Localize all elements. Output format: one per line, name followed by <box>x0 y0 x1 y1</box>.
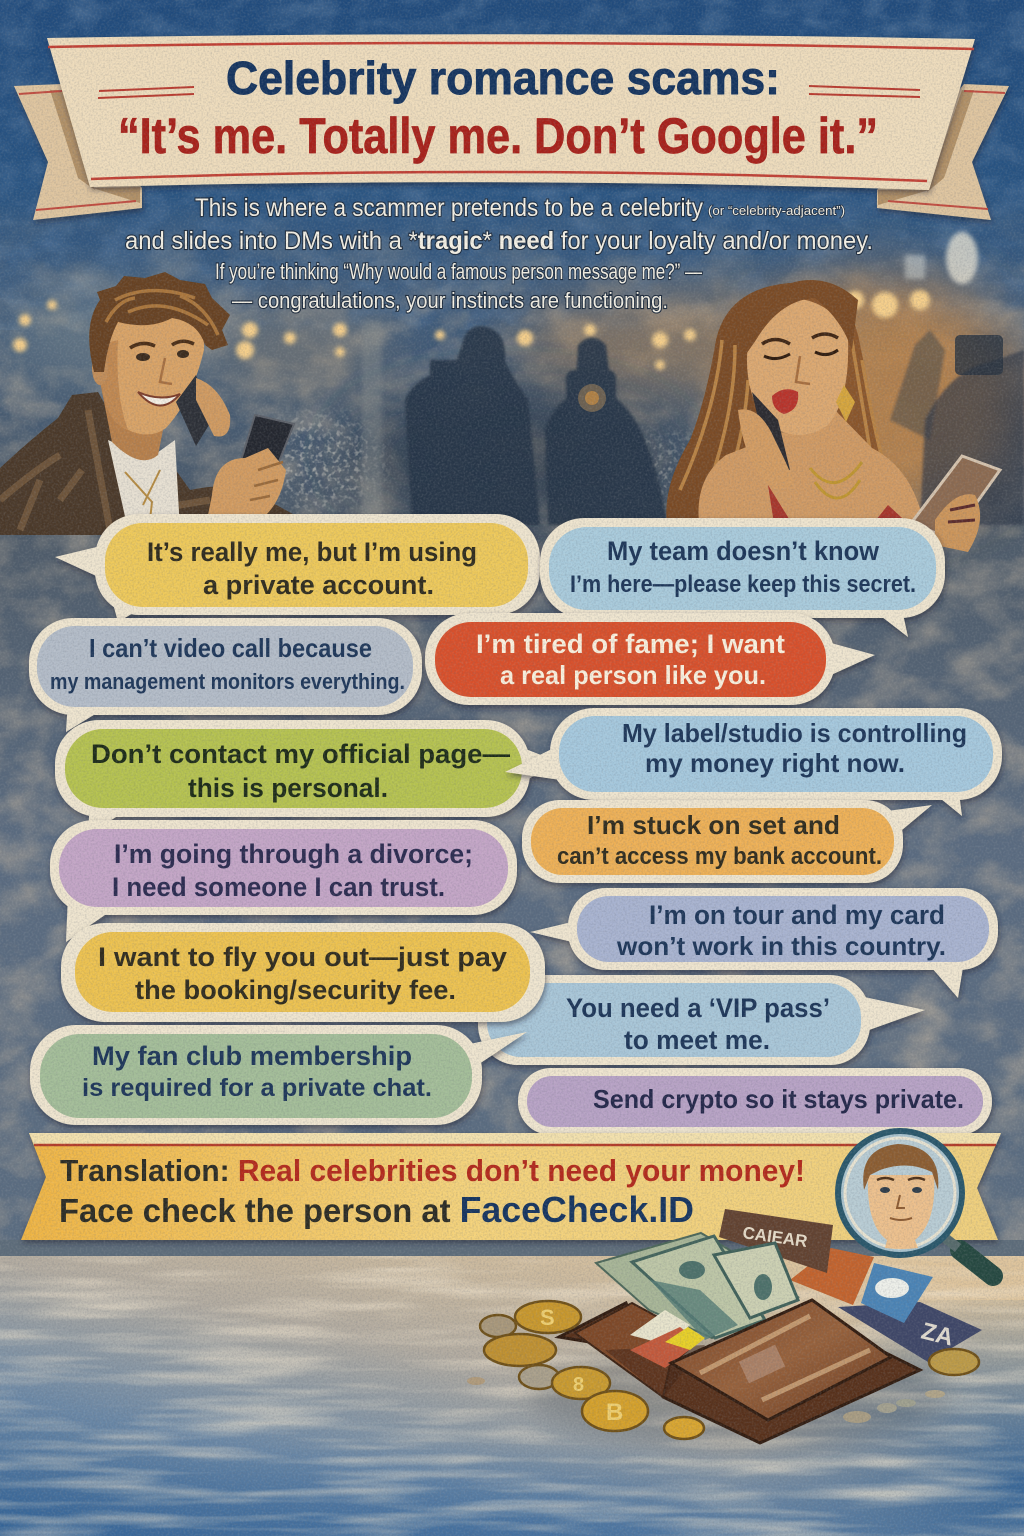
speech bubble: fan club <box>30 1025 527 1125</box>
intro text: (or “celebrity-adjacent”) <box>708 203 845 218</box>
speech bubble: video call <box>29 618 422 732</box>
title line 1: Celebrity romance scams: <box>226 52 780 104</box>
banner main parchment <box>47 34 975 190</box>
speech bubble: keep secret <box>540 518 945 637</box>
speech bubble: label controlling money <box>505 708 1002 816</box>
icon: magnifying glass with face <box>838 1131 993 1276</box>
wallet body <box>559 1300 920 1443</box>
translation line: Translation: Real celebrities don’t need your money! <box>60 1153 805 1188</box>
speech bubble: official page <box>55 720 562 835</box>
speech bubble: divorce: I’m going through a divorce; <box>114 839 473 869</box>
speech bubble: crypto: Send crypto so it stays private. <box>593 1084 964 1114</box>
intro text <box>125 194 873 313</box>
speech bubble: tired of fame: a real person like you. <box>500 660 766 690</box>
intro text: and slides into DMs with a *tragic* need for your loyalty and/or money. <box>125 227 873 255</box>
speech bubble: video call: I can’t video call because <box>89 633 372 663</box>
speech bubble: official page: Don’t contact my official page— <box>91 739 510 769</box>
gold and silver coins <box>467 1301 979 1439</box>
speech bubble: fan club: My fan club membership <box>92 1041 412 1071</box>
speech bubble: stuck on set <box>522 800 932 883</box>
speech bubble: booking fee <box>61 923 545 1022</box>
gold and silver coins: S <box>540 1305 555 1330</box>
gift cards <box>719 1209 982 1362</box>
person: woman blowing a kiss on phones <box>666 280 1000 552</box>
speech bubble: label controlling money: my money right now. <box>645 748 905 778</box>
intro text: If you’re thinking “Why would a famous person message me?” — <box>215 259 702 284</box>
person: smiling man on phones <box>0 272 306 535</box>
speech bubble: keep secret: I’m here—please keep this secret. <box>570 571 916 598</box>
speech bubble: on tour: I’m on tour and my card <box>649 900 945 930</box>
speech bubble: stuck on set: can’t access my bank account. <box>557 843 882 870</box>
speech bubble: VIP pass: You need a ‘VIP pass’ <box>566 993 830 1023</box>
speech bubble: label controlling money: My label/studio is controlling <box>622 718 967 748</box>
title banner <box>14 34 1009 220</box>
speech bubble: fan club: is required for a private chat. <box>82 1074 432 1102</box>
translation banner <box>21 1133 1001 1240</box>
speech bubble: official page: this is personal. <box>188 773 388 803</box>
gift cards: ZA <box>919 1318 956 1352</box>
speech bubble: private account: It’s really me, but I’m using <box>147 537 477 567</box>
speech bubble: on tour: won’t work in this country. <box>616 931 946 961</box>
speech bubble: VIP pass <box>478 975 925 1065</box>
intro text: — congratulations, your instincts are functioning. <box>232 288 668 313</box>
facecheck line: Face check the person at FaceCheck.ID <box>59 1189 694 1230</box>
speech bubble: crypto <box>518 1068 992 1135</box>
gift cards: CAIEAR <box>741 1223 809 1251</box>
speech bubble: booking fee: I want to fly you out—just pay <box>98 942 507 972</box>
speech bubble: tired of fame <box>425 613 875 705</box>
title line 2: “It’s me. Totally me. Don’t Google it.” <box>118 108 878 164</box>
speech bubble: on tour <box>530 888 998 998</box>
intro text: This is where a scammer pretends to be a celebrity <box>195 194 703 222</box>
speech bubble: tired of fame: I’m tired of fame; I want <box>476 629 785 659</box>
banner right ribbon tail <box>877 84 1009 220</box>
speech bubble: VIP pass: to meet me. <box>624 1025 770 1055</box>
speech bubble: divorce: I need someone I can trust. <box>112 872 445 902</box>
speech bubble: video call: my management monitors everything. <box>50 669 405 694</box>
speech bubble: keep secret: My team doesn’t know <box>607 536 880 566</box>
gold and silver coins: 8 <box>573 1374 584 1396</box>
scene: photographers and stage lights <box>13 232 1024 525</box>
illustration: wallet, cash, cards and coins <box>467 1209 982 1445</box>
speech bubble: private account: a private account. <box>203 570 434 600</box>
speech bubble: stuck on set: I’m stuck on set and <box>587 810 840 840</box>
speech bubble: private account <box>55 514 540 622</box>
speech bubble: booking fee: the booking/security fee. <box>135 975 456 1005</box>
cash <box>596 1233 798 1340</box>
banner left ribbon tail <box>14 84 142 220</box>
gold and silver coins: B <box>606 1399 623 1426</box>
speech bubble: divorce <box>50 820 517 942</box>
